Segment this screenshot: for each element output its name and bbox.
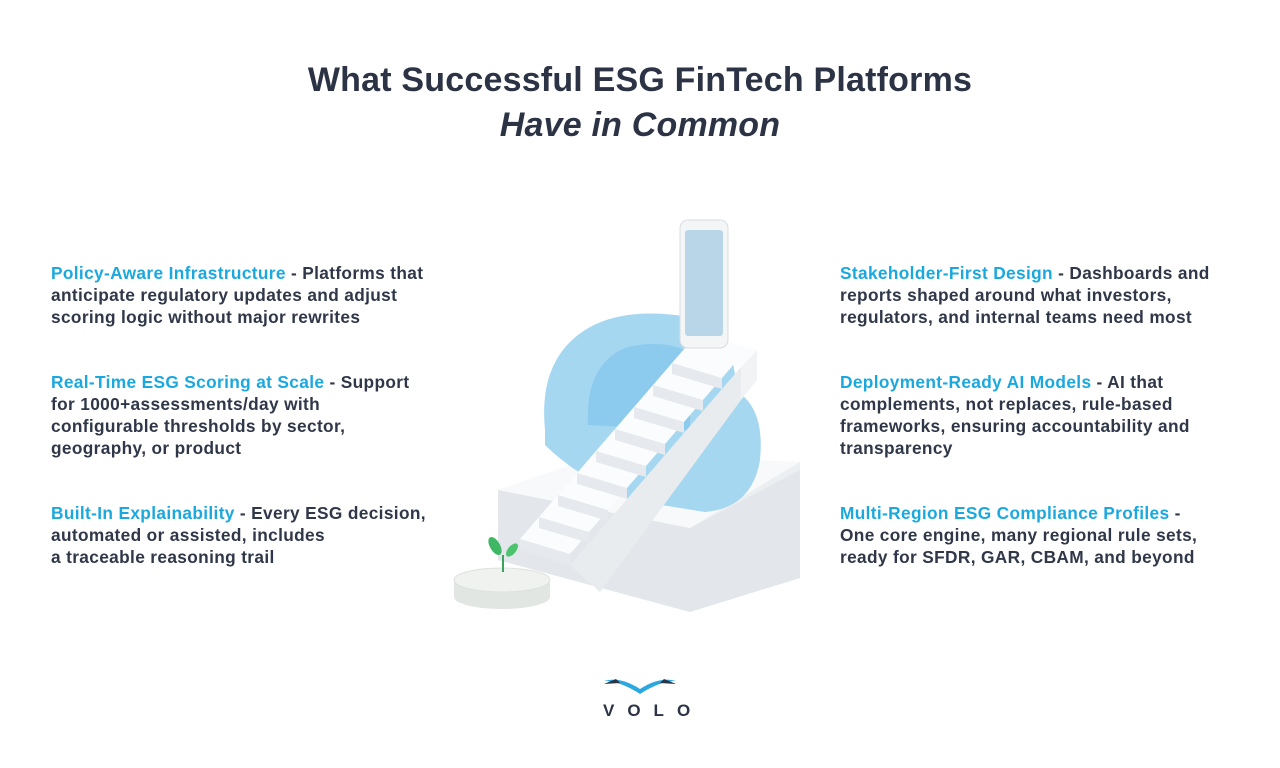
text: explainability: a traceable reasoning trail <box>51 547 275 567</box>
text: multi-region: One core engine, many regional rule sets, <box>840 525 1197 545</box>
logo <box>603 679 703 720</box>
text: real-time: geography, or product <box>51 438 241 458</box>
text: explainability <box>51 503 426 567</box>
stairs <box>520 335 757 592</box>
coin with sprout <box>454 535 550 609</box>
text: AI models: Deployment-Ready AI Models - AI that <box>840 372 1163 392</box>
cloud <box>544 314 761 512</box>
text: stakeholder: regulators, and internal teams need most <box>840 307 1192 327</box>
text: explainability: Built-In Explainability - Every ESG decision, <box>51 503 426 523</box>
title: Have in Common <box>500 106 780 144</box>
text: policy-aware <box>51 263 423 327</box>
logo: VOLO <box>603 701 703 720</box>
title: What Successful ESG FinTech Platforms <box>308 61 972 99</box>
text: real-time <box>51 372 409 458</box>
text: real-time: Real-Time ESG Scoring at Scale - Support <box>51 372 409 392</box>
text: policy-aware: Policy-Aware Infrastructure - Platforms that <box>51 263 423 283</box>
text: explainability: automated or assisted, includes <box>51 525 325 545</box>
text: stakeholder: reports shaped around what investors, <box>840 285 1172 305</box>
text: multi-region: Multi-Region ESG Compliance Profiles - <box>840 503 1181 523</box>
text: multi-region <box>840 503 1197 567</box>
title <box>308 61 972 144</box>
text: stakeholder: Stakeholder-First Design - Dashboards and <box>840 263 1210 283</box>
text: AI models: frameworks, ensuring accountability and <box>840 416 1190 436</box>
text: AI models <box>840 372 1190 458</box>
text: stakeholder <box>840 263 1210 327</box>
phone <box>680 220 728 348</box>
text: policy-aware: scoring logic without major rewrites <box>51 307 360 327</box>
text: policy-aware: anticipate regulatory updates and adjust <box>51 285 397 305</box>
text: AI models: transparency <box>840 438 953 458</box>
paper stack base <box>498 455 800 612</box>
text: multi-region: ready for SFDR, GAR, CBAM, and beyond <box>840 547 1195 567</box>
text: real-time: for 1000+assessments/day with <box>51 394 320 414</box>
text: real-time: configurable thresholds by sector, <box>51 416 345 436</box>
text: AI models: complements, not replaces, rule-based <box>840 394 1173 414</box>
